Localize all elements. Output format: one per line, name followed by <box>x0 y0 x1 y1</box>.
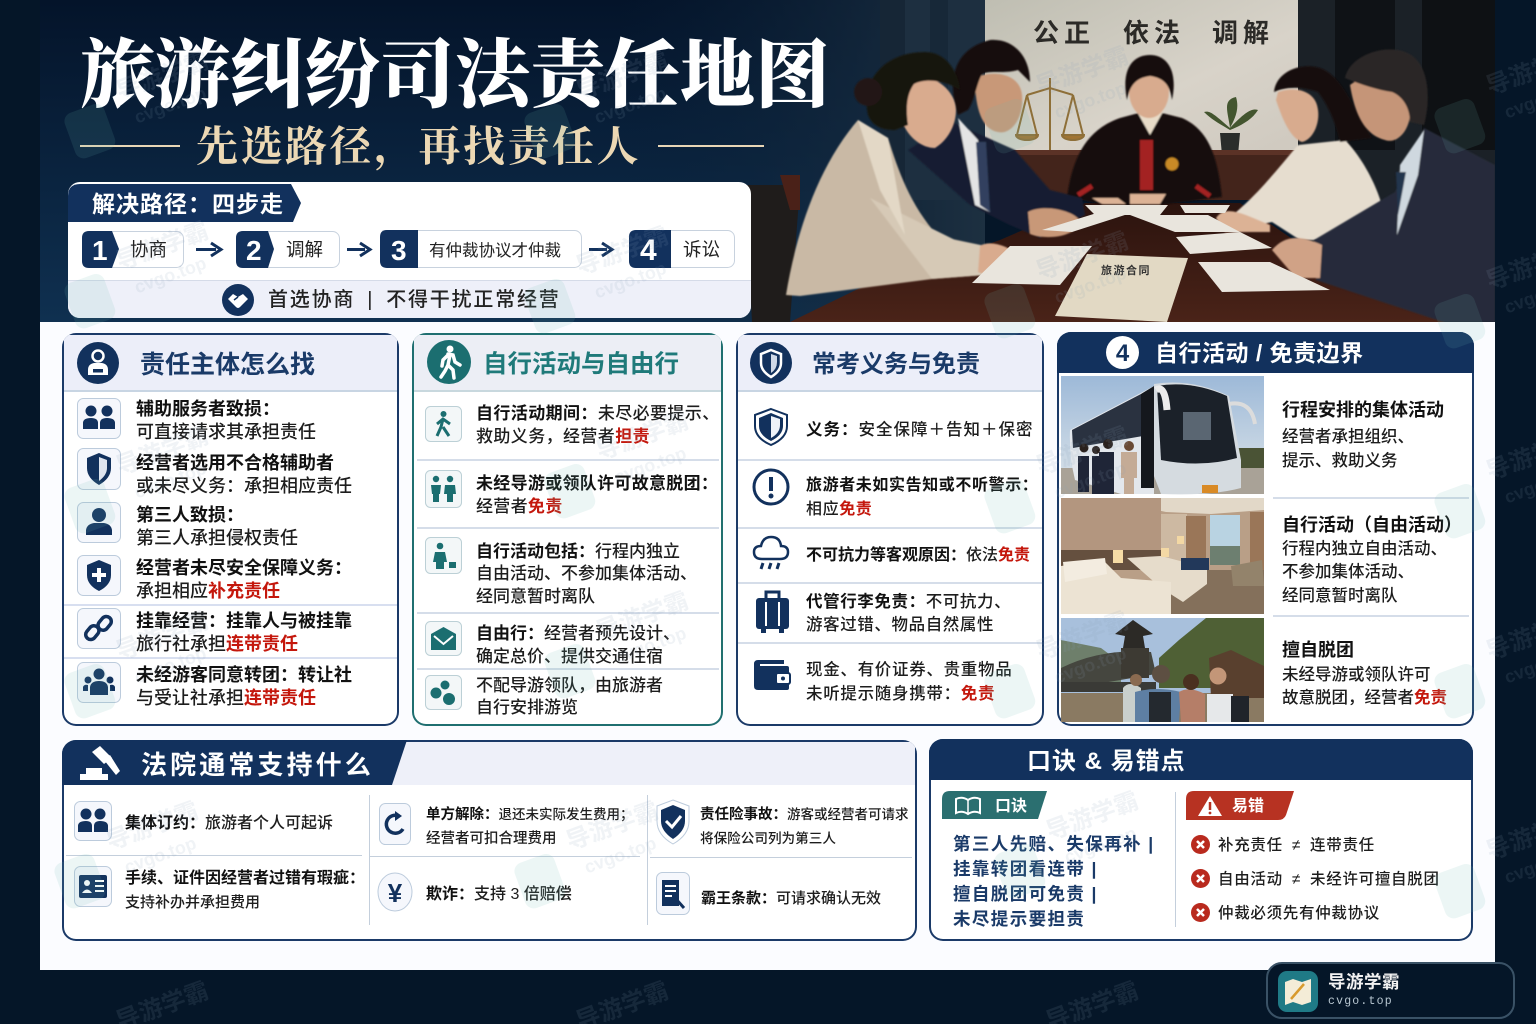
watermarks: cvgo.top <box>612 623 689 667</box>
front of bus <box>1154 382 1241 494</box>
text: group transfer: 与受让社承担连带责任 <box>136 688 316 708</box>
icon: rain cloud <box>752 535 790 572</box>
text: flawed documents: 手续、证件因经营者过错有瑕疵： <box>125 870 365 886</box>
text: during self activity: 救助义务，经营者担责 <box>476 427 650 446</box>
text: activity definition: 自行活动包括：行程内独立 <box>476 542 680 560</box>
woman in beige blazer <box>786 52 1024 296</box>
brand name: 导游学霸 <box>1328 972 1400 992</box>
step 1: 协商 <box>130 239 167 260</box>
watermarks: cvgo.top <box>132 83 209 127</box>
mnemonic banner <box>942 791 1048 819</box>
icon: shield <box>750 342 792 384</box>
watermarks: cvgo.top <box>592 83 669 127</box>
mnemonic banner: 口诀 <box>995 797 1027 815</box>
mnemonic text: 擅自脱团可免责 | <box>953 884 1098 904</box>
text: group itinerary: 行程安排的集体活动 <box>1282 400 1444 420</box>
watermarks: 导游学霸 <box>563 797 662 856</box>
icon: shield plus <box>77 555 121 596</box>
icon: id card <box>74 866 112 907</box>
watermarks: 导游学霸 <box>113 422 212 481</box>
text: third party: 第三人致损： <box>136 504 244 524</box>
text: concealment: 相应免责 <box>806 500 872 518</box>
panel header <box>64 335 397 392</box>
heading banner <box>68 184 301 222</box>
icon: handshake <box>222 284 254 316</box>
text: fraud: 欺诈：支持 3 倍赔偿 <box>426 886 572 902</box>
header background and courtroom photo <box>40 0 1495 322</box>
heading banner: 解决路径：四步走 <box>92 191 284 217</box>
icon: number 4 <box>1106 336 1139 369</box>
mnemonic text: 第三人先赔、失保再补 | <box>953 834 1155 854</box>
mistake 1 <box>1191 833 1461 855</box>
watermarks: cvgo.top <box>1062 823 1139 867</box>
text: safety duty: 承担相应补充责任 <box>136 580 280 600</box>
text: free activity: 行程内独立自由活动、 <box>1282 540 1447 558</box>
panel: four step resolution path <box>68 182 751 318</box>
text: unqualified helper <box>136 452 352 496</box>
cabinet <box>1018 155 1290 200</box>
mistake 1: 补充责任 ≠ 连带责任 <box>1218 836 1375 854</box>
icon: half shield <box>77 448 121 490</box>
icon: shield <box>754 408 788 446</box>
text: leaving group: 未经导游或领队许可故意脱团： <box>476 474 718 492</box>
wall slogan: 调解 <box>1212 18 1274 48</box>
text: leaving group <box>476 474 718 516</box>
watermarks: 导游学霸 <box>573 222 672 281</box>
text: auxiliary staff: 可直接请求其承担责任 <box>136 422 316 442</box>
subtitle with rules: 先选路径，再找责任人 <box>196 125 641 171</box>
text: free activity: 自行活动（自由活动） <box>1282 514 1462 534</box>
text: luggage: 游客过错、物品自然属性 <box>806 616 994 634</box>
icon: gavel <box>80 746 120 780</box>
text: activity definition: 自由活动、不参加集体活动、 <box>476 564 697 583</box>
photo: coach bus <box>1061 376 1264 494</box>
text: luggage: 代管行李免责：不可抗力、 <box>806 592 1011 610</box>
chair <box>745 185 800 322</box>
watermarks: cvgo.top <box>132 253 209 297</box>
documents on table <box>972 205 1330 292</box>
text: group contract: 集体订约：旅游者个人可起诉 <box>125 814 333 832</box>
icon: chain link <box>77 608 121 649</box>
step 1 <box>82 231 184 268</box>
icon: number 4: 4 <box>1116 340 1130 367</box>
mistake 2: 自由活动 ≠ 未经许可擅自脱团 <box>1218 870 1440 888</box>
mnemonic text: 未尽提示要担责 <box>953 908 1085 928</box>
text: affiliation: 旅行社承担连带责任 <box>136 634 298 654</box>
text: free activity: 不参加集体活动、 <box>1282 563 1414 581</box>
mnemonic text: 挂靠转团看连带 | <box>953 858 1098 878</box>
text: auxiliary staff <box>136 398 316 442</box>
text: affiliation: 挂靠经营：挂靠人与被挂靠 <box>136 610 352 630</box>
arrow <box>347 242 373 258</box>
watermarks: 导游学霸 <box>1043 787 1142 846</box>
heading: 责任主体怎么找 <box>140 351 315 379</box>
text: force majeure: 不可抗力等客观原因：依法免责 <box>806 546 1030 564</box>
heading: 自行活动 / 免责边界 <box>1155 340 1364 366</box>
text: liability insurance: 将保险公司列为第三人 <box>700 830 836 846</box>
text: no guide: 自行安排游览 <box>476 698 578 717</box>
watermarks: 导游学霸 <box>103 797 202 856</box>
text: no guide: 不配导游领队，由旅游者 <box>476 676 663 694</box>
tip text: 首选协商 | 不得干扰正常经营 <box>268 289 561 311</box>
side of bus <box>1070 386 1154 494</box>
wall slogan: 公正 <box>1033 18 1095 48</box>
brand url: cvgo.top <box>1328 995 1393 1008</box>
text: group transfer: 未经游客同意转团：转让社 <box>136 664 352 684</box>
watermarks: cvgo.top <box>1052 263 1129 307</box>
text: leaving tour <box>1282 636 1468 712</box>
step 2 <box>236 231 340 268</box>
step 3: 有仲裁协议才仲裁 <box>429 241 561 260</box>
watermarks: cvgo.top <box>1052 643 1129 687</box>
wall slogan: 依法 <box>1123 18 1185 48</box>
heading: 常考义务与免责 <box>812 351 980 378</box>
icon: yen <box>377 872 413 912</box>
text: free activity <box>1282 511 1468 611</box>
panel header <box>1057 332 1474 373</box>
text: third party: 第三人承担侵权责任 <box>136 528 298 548</box>
panel header <box>738 335 1042 392</box>
text: free travel: 确定总价、提供交通住宿 <box>476 647 663 666</box>
text: affiliation <box>136 610 352 654</box>
icon: group <box>77 662 121 703</box>
panel header <box>929 739 1473 780</box>
text: concealment: 旅游者未如实告知或不听警示： <box>806 476 1038 494</box>
text: group itinerary <box>1282 396 1468 472</box>
watermarks: cvgo.top <box>592 258 669 302</box>
contract document <box>1055 254 1188 322</box>
text: group itinerary: 提示、救助义务 <box>1282 452 1398 470</box>
step 3 <box>380 230 582 268</box>
arrow <box>196 242 224 258</box>
photo: hotel room <box>1061 498 1264 614</box>
watermarks: cvgo.top <box>612 443 689 487</box>
watermarks: cvgo.top <box>1052 458 1129 502</box>
icon: insurance shield <box>656 799 690 845</box>
wall slogan <box>1034 20 1268 44</box>
text: concealment <box>806 476 1038 518</box>
panel: self-guided activity and free travel <box>412 333 723 726</box>
icon: envelope <box>425 621 462 656</box>
heading banner <box>62 740 408 786</box>
icon: suitcase <box>755 590 790 633</box>
watermarks: 导游学霸 <box>1033 607 1132 666</box>
heading: 口诀 & 易错点 <box>1027 748 1186 775</box>
mistake 2 <box>1191 867 1461 889</box>
icon: alert circle <box>752 468 790 506</box>
text: no guide <box>476 676 663 717</box>
step 4: 诉讼 <box>683 239 720 260</box>
watermarks: 导游学霸 <box>113 607 212 666</box>
text: unilateral termination <box>426 802 634 850</box>
text: valuables: 未听提示随身携带：免责 <box>806 684 995 702</box>
arrow <box>589 242 615 258</box>
text: group transfer <box>136 664 352 708</box>
text: activity definition: 经同意暂时离队 <box>476 586 595 606</box>
mistake 3: 仲裁必须先有仲裁协议 <box>1218 904 1380 922</box>
panel: who is liable <box>62 333 399 726</box>
text: flawed documents <box>125 866 365 914</box>
panel: activity boundaries <box>1057 332 1474 726</box>
title: 旅游纠纷司法责任地图 <box>80 35 830 118</box>
page white background <box>40 322 1495 970</box>
step 2: 调解 <box>286 239 323 260</box>
text: valuables <box>806 658 1012 706</box>
text: unilateral termination: 单方解除：退还未实际发生费用； <box>426 806 634 822</box>
icon: yen: ¥ <box>388 878 403 908</box>
icon: circles <box>425 675 462 710</box>
text: valuables: 现金、有价证券、贵重物品 <box>806 660 1012 678</box>
watermarks: 导游学霸 <box>1033 227 1132 286</box>
text: liability insurance: 责任险事故：游客或经营者可请求 <box>700 806 908 822</box>
step 4 <box>629 230 735 268</box>
watermarks: 导游学霸 <box>593 587 692 646</box>
watermarks: 导游学霸 <box>113 47 212 106</box>
text: unfair terms: 霸王条款：可请求确认无效 <box>701 890 881 906</box>
icon: two people <box>74 801 112 841</box>
icon: walking person <box>427 340 471 384</box>
panel header <box>414 335 721 392</box>
man in navy suit <box>908 40 1085 238</box>
judge <box>1067 55 1222 205</box>
panel: duties and exemptions <box>736 333 1044 726</box>
text: unilateral termination: 经营者可扣合理费用 <box>426 830 556 846</box>
contract document: 旅游合同 <box>1101 263 1151 277</box>
heading: 自行活动与自由行 <box>483 351 679 378</box>
text: leaving tour: 擅自脱团 <box>1282 640 1354 660</box>
watermarks: cvgo.top <box>582 833 659 877</box>
watermarks: cvgo.top <box>122 833 199 877</box>
text: unqualified helper: 或未尽义务：承担相应责任 <box>136 476 352 496</box>
icon: two people <box>77 398 121 439</box>
icon: refresh <box>379 803 411 845</box>
icon: traveller with bag <box>425 537 462 574</box>
text: third party <box>136 504 298 548</box>
text: duties: 义务：安全保障＋告知＋保密 <box>806 420 1034 438</box>
step 2: 2 <box>246 235 262 266</box>
text: leaving group: 经营者免责 <box>476 497 563 516</box>
text: safety duty: 经营者未尽安全保障义务： <box>136 558 352 578</box>
text: luggage <box>806 590 1011 636</box>
photo: river town tourists <box>1061 618 1264 722</box>
tip strip <box>68 280 751 318</box>
icon: couple <box>425 470 462 508</box>
icon: document with gavel <box>656 872 690 915</box>
text: free activity: 经同意暂时离队 <box>1282 586 1398 604</box>
tourists boarding <box>1078 452 1114 494</box>
text: unqualified helper: 经营者选用不合格辅助者 <box>136 452 334 472</box>
panel: mnemonic and common mistakes <box>929 739 1473 941</box>
table <box>790 203 1445 322</box>
scales of justice <box>1016 78 1084 152</box>
potted plant <box>1204 97 1258 155</box>
mistakes banner: 易错 <box>1232 797 1264 815</box>
watermarks: cvgo.top <box>132 458 209 502</box>
mistakes banner <box>1186 791 1295 820</box>
text: flawed documents: 支持补办并承担费用 <box>125 894 260 910</box>
icon: map app <box>1278 971 1318 1012</box>
mnemonic text <box>953 832 1155 932</box>
watermarks: 导游学霸 <box>1033 42 1132 101</box>
watermarks: 导游学霸 <box>573 47 672 106</box>
text: safety duty <box>136 558 352 600</box>
text: liability insurance <box>700 802 908 850</box>
icon: walker <box>425 406 462 442</box>
text: free travel <box>476 624 680 666</box>
panel: what courts support <box>62 740 917 941</box>
watermarks: cvgo.top <box>1052 78 1129 122</box>
text: free travel: 自由行：经营者预先设计、 <box>476 624 680 642</box>
text: auxiliary staff: 辅助服务者致损： <box>136 398 280 418</box>
woman in cream sweater <box>1215 66 1385 240</box>
text: during self activity: 自行活动期间：未尽必要提示、 <box>476 404 720 422</box>
text: group itinerary: 经营者承担组织、 <box>1282 428 1414 446</box>
step 3: 3 <box>391 235 407 266</box>
heading banner: 法院通常支持什么 <box>141 750 374 780</box>
brand badge <box>1266 962 1515 1019</box>
watermarks: cvgo.top <box>132 643 209 687</box>
mistake 3 <box>1191 901 1461 923</box>
text: activity definition <box>476 542 697 606</box>
icon: person <box>77 342 119 384</box>
icon: wallet <box>754 660 790 691</box>
panel header <box>64 742 915 785</box>
watermarks: 导游学霸 <box>593 407 692 466</box>
step 4: 4 <box>640 234 657 267</box>
icon: person <box>77 502 121 543</box>
watermarks: 导游学霸 <box>113 217 212 276</box>
watermarks: 导游学霸 <box>1033 422 1132 481</box>
text: during self activity <box>476 404 720 446</box>
step 1: 1 <box>92 235 108 266</box>
text: leaving tour: 故意脱团，经营者免责 <box>1282 689 1447 707</box>
man in dark grey suit <box>1272 49 1495 322</box>
text: leaving tour: 未经导游或领队许可 <box>1282 666 1430 684</box>
